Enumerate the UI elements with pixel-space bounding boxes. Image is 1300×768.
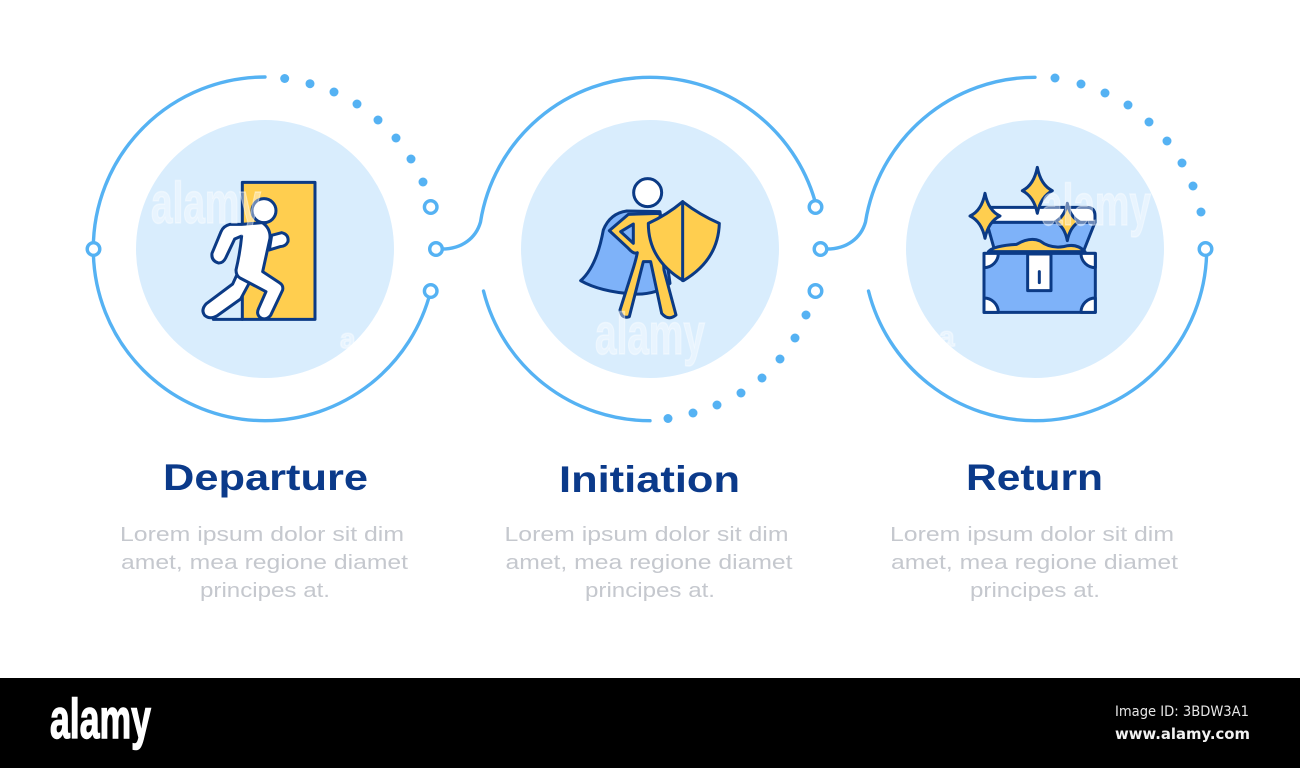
solid arc 2 bottom bbox=[484, 291, 650, 421]
body text 1 bbox=[120, 523, 408, 602]
body text 3: Lorem ipsum dolor sit dim bbox=[890, 523, 1174, 546]
image id: Image ID: 3BDW3A1 bbox=[1115, 704, 1249, 720]
body text 1: Lorem ipsum dolor sit dim bbox=[120, 523, 404, 546]
body text 1: principes at. bbox=[200, 579, 330, 602]
inner circle 3 bbox=[906, 120, 1164, 378]
body text 3 bbox=[890, 523, 1178, 602]
ring nodes 2 bbox=[430, 201, 822, 297]
step 3: return bbox=[814, 74, 1212, 602]
connector and solid arc 3 top bbox=[827, 77, 1035, 249]
ring nodes 3 bbox=[814, 243, 1212, 255]
dotted arc 1 bbox=[280, 74, 428, 186]
body text 2 bbox=[504, 523, 793, 602]
watermarks bbox=[151, 171, 1151, 367]
ring nodes 1 bbox=[87, 201, 437, 297]
website: www.alamy.com bbox=[1115, 725, 1250, 743]
dotted arc 2 bbox=[664, 310, 810, 423]
icon: treasure chest with sparkles bbox=[970, 167, 1095, 312]
step 2: initiation bbox=[430, 77, 822, 602]
footer logo: alamy bbox=[50, 687, 151, 750]
watermarks: alamy bbox=[1041, 173, 1151, 238]
watermarks: alamy bbox=[595, 302, 705, 367]
icon: person running through door bbox=[203, 182, 315, 319]
solid arc 3 bottom bbox=[868, 249, 1207, 421]
body text 2: Lorem ipsum dolor sit dim bbox=[504, 523, 788, 546]
body text 1: amet, mea regione diamet bbox=[121, 551, 408, 574]
heading 3: Return bbox=[966, 457, 1103, 498]
watermarks: a bbox=[340, 323, 356, 354]
body text 2: amet, mea regione diamet bbox=[506, 551, 793, 574]
watermarks: a bbox=[939, 321, 955, 352]
icon: hero with cape and shield bbox=[581, 179, 719, 318]
heading 2: Initiation bbox=[559, 459, 740, 500]
inner circle 1 bbox=[136, 120, 394, 378]
watermarks: alamy bbox=[151, 171, 261, 236]
footer bar bbox=[0, 678, 1300, 768]
dotted arc 3 bbox=[1050, 74, 1206, 216]
body text 3: principes at. bbox=[970, 579, 1100, 602]
step 1: departure bbox=[87, 74, 437, 602]
solid arc 1 bbox=[93, 77, 431, 421]
body text 3: amet, mea regione diamet bbox=[891, 551, 1178, 574]
heading 1: Departure bbox=[163, 457, 368, 498]
connector and solid arc 2 top bbox=[442, 77, 815, 249]
body text 2: principes at. bbox=[585, 579, 715, 602]
inner circle 2 bbox=[521, 120, 779, 378]
